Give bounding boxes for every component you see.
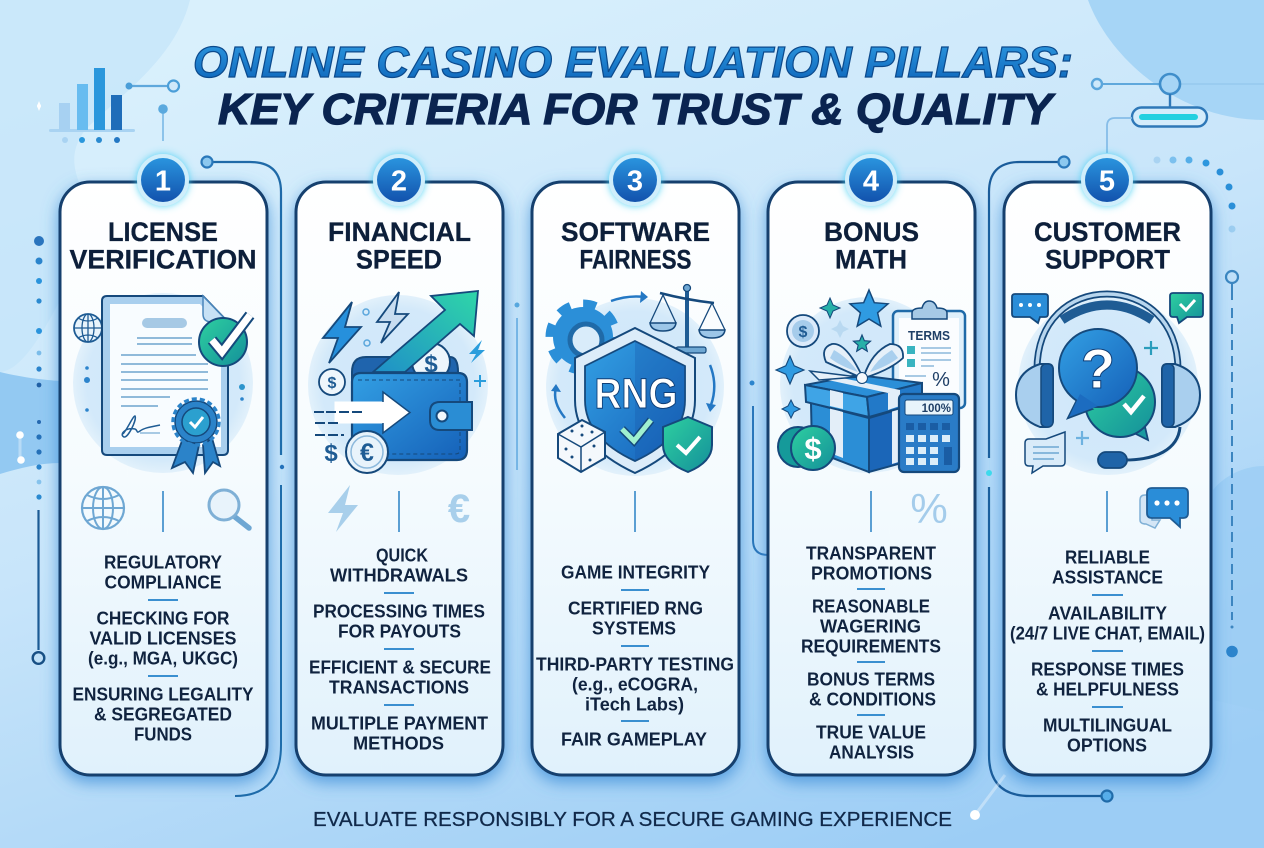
text: criteria: ENSURING LEGALITY <box>72 684 254 704</box>
text: criteria: & HELPFULNESS <box>1036 678 1179 700</box>
heading: FINANCIAL <box>328 217 471 247</box>
heading: SOFTWARE <box>561 217 710 247</box>
icon: headset with chat bubbles <box>1012 293 1203 475</box>
icon: certified document <box>73 293 253 473</box>
panel: license verification <box>60 154 267 775</box>
text: criteria: RELIABLE <box>1065 546 1150 568</box>
text: criteria: PROMOTIONS <box>811 562 932 584</box>
footer tagline: EVALUATE RESPONSIBLY FOR A SECURE GAMING EXPERIENCE <box>313 809 952 831</box>
badge 4 <box>845 154 897 206</box>
heading <box>561 217 710 274</box>
badge 4: 4 <box>863 166 879 198</box>
heading: FAIRNESS <box>580 244 692 274</box>
icon: headset with chat bubbles: ? <box>1081 337 1115 400</box>
text: criteria: SYSTEMS <box>592 618 676 638</box>
text: criteria: VALID LICENSES <box>90 628 236 648</box>
text: criteria <box>1010 546 1205 756</box>
heading: BONUS <box>824 217 919 247</box>
icon: wallet with arrow: $ <box>324 440 338 467</box>
icon: RNG shield: RNG <box>594 370 678 418</box>
panel: financial speed <box>296 154 503 775</box>
connector 1-2 <box>202 156 284 796</box>
text: criteria: TRANSACTIONS <box>329 676 469 698</box>
icon: lightning bolt <box>328 485 358 532</box>
icon: wallet with arrow <box>308 291 488 475</box>
panel: bonus math <box>768 154 975 775</box>
text: criteria: ANALYSIS <box>829 742 914 762</box>
text: criteria <box>801 542 941 762</box>
heading <box>328 217 471 274</box>
icon: gift, terms and calculator <box>776 290 965 473</box>
decoration: dotted line left <box>16 236 44 664</box>
text: criteria: FOR PAYOUTS <box>338 620 461 642</box>
connector 2-3 <box>514 302 520 470</box>
text: criteria: (24/7 LIVE CHAT, EMAIL) <box>1010 622 1205 644</box>
text: criteria: & SEGREGATED <box>94 704 232 724</box>
text: criteria: FUNDS <box>134 724 192 744</box>
text: criteria: AVAILABILITY <box>1048 602 1168 624</box>
text: criteria: (e.g., eCOGRA, <box>572 674 698 694</box>
text: criteria: MULTIPLE PAYMENT <box>311 712 489 734</box>
connector 3-4 <box>750 380 768 555</box>
text: criteria: BONUS TERMS <box>807 668 935 690</box>
text: criteria: & CONDITIONS <box>809 688 936 710</box>
text: criteria: iTech Labs) <box>585 694 684 714</box>
icon: percent: % <box>910 485 948 532</box>
panel: customer support <box>1004 154 1211 775</box>
text: criteria: REQUIREMENTS <box>801 636 941 656</box>
text: criteria: REASONABLE <box>812 596 930 616</box>
badge 1 <box>137 154 189 206</box>
text: criteria: PROCESSING TIMES <box>313 600 485 622</box>
text: criteria <box>309 544 491 754</box>
badge 2: 2 <box>391 166 407 198</box>
icon: wallet with arrow: $ <box>424 351 438 378</box>
badge 1: 1 <box>155 166 171 198</box>
text: criteria <box>536 562 734 750</box>
icon: wallet with arrow: $ <box>328 375 337 392</box>
title <box>193 38 1073 134</box>
text: criteria: GAME INTEGRITY <box>561 562 711 582</box>
icon: globe <box>82 487 124 529</box>
icon: gift, terms and calculator: $ <box>804 431 822 466</box>
badge 2 <box>373 154 425 206</box>
heading <box>70 217 256 274</box>
text: criteria: EFFICIENT & SECURE <box>309 656 491 678</box>
heading: VERIFICATION <box>70 244 256 274</box>
icon: RNG shield <box>546 284 725 476</box>
badge 3 <box>609 154 661 206</box>
text: criteria: FAIR GAMEPLAY <box>561 728 708 750</box>
heading: LICENSE <box>108 217 218 247</box>
heading <box>824 217 919 274</box>
decoration: dotted arc and dashed line right <box>1154 156 1238 657</box>
text: criteria: REGULATORY <box>104 552 223 572</box>
text: criteria: WAGERING <box>820 616 921 636</box>
text: criteria: OPTIONS <box>1067 734 1147 756</box>
icon: gift, terms and calculator: $ <box>799 324 808 341</box>
connector 4-5 <box>970 156 1112 820</box>
title: KEY CRITERIA FOR TRUST & QUALITY <box>218 85 1056 134</box>
icon: magnifier <box>209 490 249 528</box>
text: criteria: CERTIFIED RNG <box>568 598 703 618</box>
text: criteria: QUICK <box>376 544 429 566</box>
text: criteria: WITHDRAWALS <box>330 564 468 586</box>
text: criteria: COMPLIANCE <box>104 572 222 592</box>
icon: gift, terms and calculator: TERMS <box>908 329 950 343</box>
text: criteria: TRUE VALUE <box>816 722 926 742</box>
decoration: connector nodes top left <box>126 80 179 141</box>
badge 5 <box>1081 154 1133 206</box>
text: criteria <box>72 552 254 744</box>
decoration: bar chart <box>37 68 135 143</box>
heading: SUPPORT <box>1045 244 1170 274</box>
badge 5: 5 <box>1099 166 1115 198</box>
text: criteria: RESPONSE TIMES <box>1031 658 1184 680</box>
text: criteria: THIRD-PARTY TESTING <box>536 654 734 674</box>
badge 3: 3 <box>627 166 643 198</box>
heading: SPEED <box>356 244 442 274</box>
text: criteria: ASSISTANCE <box>1052 566 1163 588</box>
icon: speech bubbles <box>1140 488 1188 528</box>
heading <box>1034 217 1181 274</box>
text: criteria: METHODS <box>353 732 444 754</box>
icon: gift, terms and calculator: % <box>932 369 950 391</box>
heading: CUSTOMER <box>1034 217 1181 247</box>
icon: gift, terms and calculator: 100% <box>922 403 951 415</box>
text: criteria: MULTILINGUAL <box>1043 714 1172 736</box>
icon: euro: € <box>448 487 470 531</box>
text: criteria: (e.g., MGA, UKGC) <box>88 648 238 668</box>
text: criteria: CHECKING FOR <box>96 608 230 628</box>
panel: software fairness <box>532 154 739 775</box>
text: criteria: TRANSPARENT <box>806 542 937 564</box>
heading: MATH <box>835 244 907 274</box>
title: ONLINE CASINO EVALUATION PILLARS: <box>193 38 1073 87</box>
icon: wallet with arrow: € <box>360 439 374 467</box>
decoration: connector nodes top right <box>1092 74 1264 153</box>
